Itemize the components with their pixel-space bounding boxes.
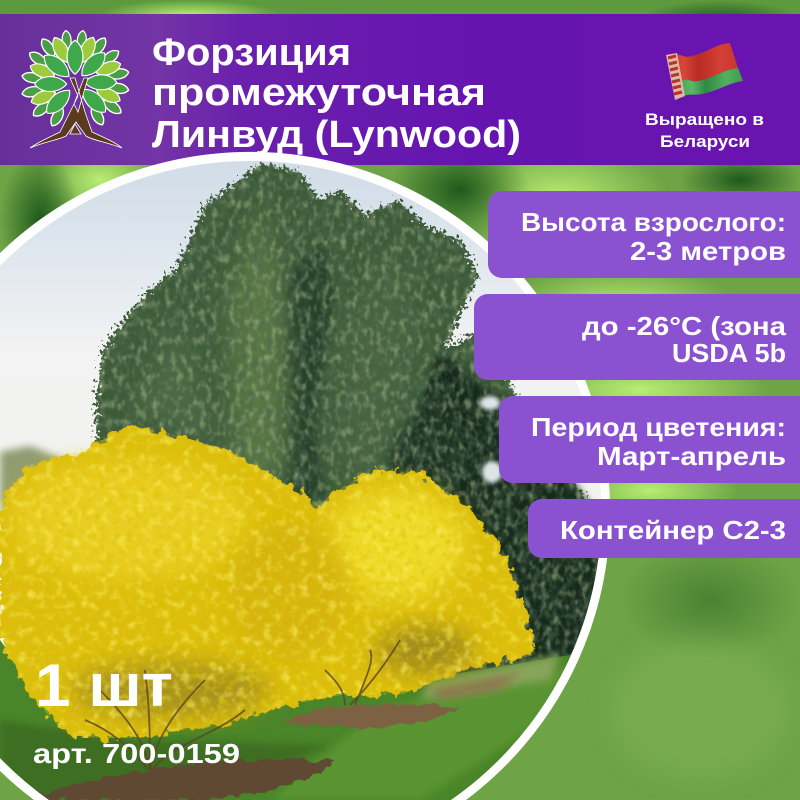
logo leaves: inner ring xyxy=(35,40,117,118)
panel: bloom period xyxy=(499,396,800,483)
panel: container: Контейнер С2-3 xyxy=(560,515,786,545)
photo bushes xyxy=(0,425,535,738)
header band xyxy=(0,14,800,165)
panel: hardiness xyxy=(474,294,800,380)
panel: bloom period: Период цветения: xyxy=(531,412,786,442)
panel: hardiness: до -26°С (зона xyxy=(582,311,787,341)
title xyxy=(152,32,521,156)
quantity label: 1 шт xyxy=(35,652,173,719)
origin label: Беларуси xyxy=(660,132,750,151)
logo trunk and ground xyxy=(30,78,122,148)
photo bush stems xyxy=(85,640,400,770)
photo lawn xyxy=(0,640,600,800)
photo bush texture xyxy=(0,420,540,740)
title: промежуточная xyxy=(152,72,486,114)
photo: forsythia bushes and spruce xyxy=(0,150,610,800)
origin label xyxy=(645,110,764,151)
panel: hardiness: USDA 5b xyxy=(672,338,786,368)
logo: tree xyxy=(21,30,129,148)
panel: bloom period: Март-апрель xyxy=(597,441,786,471)
panel: mature height: Высота взрослого: xyxy=(521,207,786,237)
origin label: Выращено в xyxy=(645,110,764,129)
title: Линвуд (Lynwood) xyxy=(152,114,521,156)
article number: арт. 700-0159 xyxy=(33,738,240,769)
icon: Belarus flag xyxy=(666,43,743,100)
panel: mature height: 2-3 метров xyxy=(630,236,786,266)
photo sky gaps between branches xyxy=(480,396,500,410)
photo mulch beds xyxy=(38,672,520,800)
panel: mature height xyxy=(488,191,800,278)
logo leaves: lime ring xyxy=(28,35,123,108)
photo distant haze trees xyxy=(0,441,66,511)
logo leaves: outer ring xyxy=(21,30,129,128)
photo circle: white ring xyxy=(0,152,610,800)
title: Форзиция xyxy=(152,32,351,74)
photo sky xyxy=(0,150,610,550)
photo spruce silhouette xyxy=(90,160,600,680)
panel: container xyxy=(528,499,800,558)
